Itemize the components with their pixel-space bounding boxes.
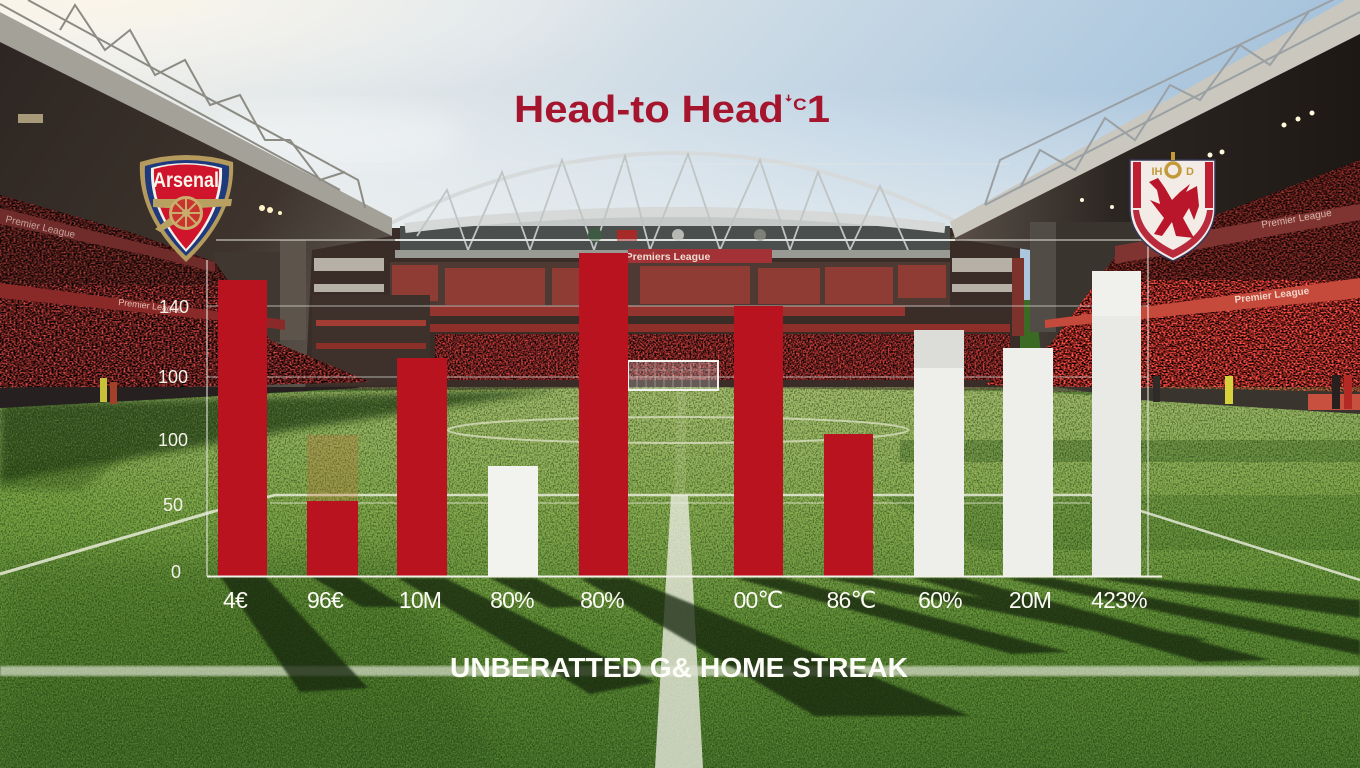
bar 9: [1003, 348, 1053, 576]
pitch markings: [0, 390, 1360, 768]
center stand with arch roof: [300, 153, 1024, 390]
bar chart: [218, 253, 1141, 576]
bar 7: [824, 434, 873, 576]
left stand: Premier League: [4, 214, 77, 241]
x axis labels: 60%: [918, 587, 962, 613]
x axis labels: 80%: [490, 587, 534, 613]
banner: Premiers League: Premiers League: [626, 251, 710, 263]
bar 1: [218, 280, 267, 576]
left stand: [0, 0, 392, 395]
y axis labels: 50: [163, 495, 183, 515]
x axis labels: 4€: [223, 587, 248, 613]
right stand: Premier League: [1261, 208, 1333, 231]
sky background: [0, 0, 1360, 300]
chart grid lines: [207, 164, 1148, 576]
y axis labels: [158, 297, 189, 582]
title: Head-to Head: [514, 89, 759, 131]
bar 2: [307, 501, 358, 576]
x axis labels: 423%: [1091, 587, 1147, 613]
bar 8: [914, 330, 964, 576]
title: 1: [807, 89, 830, 131]
pitch-side figures: [100, 375, 1352, 409]
x axis labels: 20M: [1009, 587, 1051, 613]
icon: Liverpool-style crest: [1130, 152, 1215, 261]
icon: Liverpool-style crest: D: [1186, 166, 1194, 178]
x axis labels: 80%: [580, 587, 624, 613]
x axis labels: 00℃: [733, 587, 783, 613]
bar 10: [1092, 271, 1141, 576]
y axis labels: 140: [159, 297, 189, 317]
right stand: Premier League: [1234, 286, 1310, 306]
right red banners: [1115, 204, 1360, 264]
pitch: [0, 378, 1360, 768]
x axis labels: 10M: [399, 587, 441, 613]
bar shadows on pitch: [220, 576, 1360, 716]
y axis labels: 100: [158, 430, 188, 450]
x axis labels: 96€: [307, 587, 344, 613]
red seating upper: [392, 265, 946, 305]
bar 4: [488, 466, 538, 576]
icon: Liverpool-style crest: IH: [1152, 166, 1163, 178]
roof beam right: [950, 0, 1360, 238]
x axis labels: [223, 587, 1147, 613]
goal: [628, 361, 718, 390]
icon: Arsenal crest: [140, 155, 233, 262]
x axis labels: 86℃: [826, 587, 876, 613]
caption: unbeaten home streak: UNBERATTED G& HOME STREAK: [450, 652, 908, 683]
roof beam left: [0, 12, 392, 236]
icon: Arsenal crest: Arsenal: [153, 169, 219, 192]
bar 5: [579, 253, 628, 576]
y axis labels: 0: [171, 562, 181, 582]
banner: Premiers League: [626, 249, 772, 263]
y axis labels: 100: [158, 367, 188, 387]
left red banners: [0, 208, 215, 272]
bar 3: [397, 358, 447, 576]
left stand: Premier League: [118, 297, 183, 315]
title: ꜜC: [784, 94, 807, 114]
chart baseline: [207, 576, 1162, 578]
bar 6: [734, 306, 783, 576]
right stand: [950, 0, 1360, 395]
bar 2 faded top: [307, 435, 358, 501]
